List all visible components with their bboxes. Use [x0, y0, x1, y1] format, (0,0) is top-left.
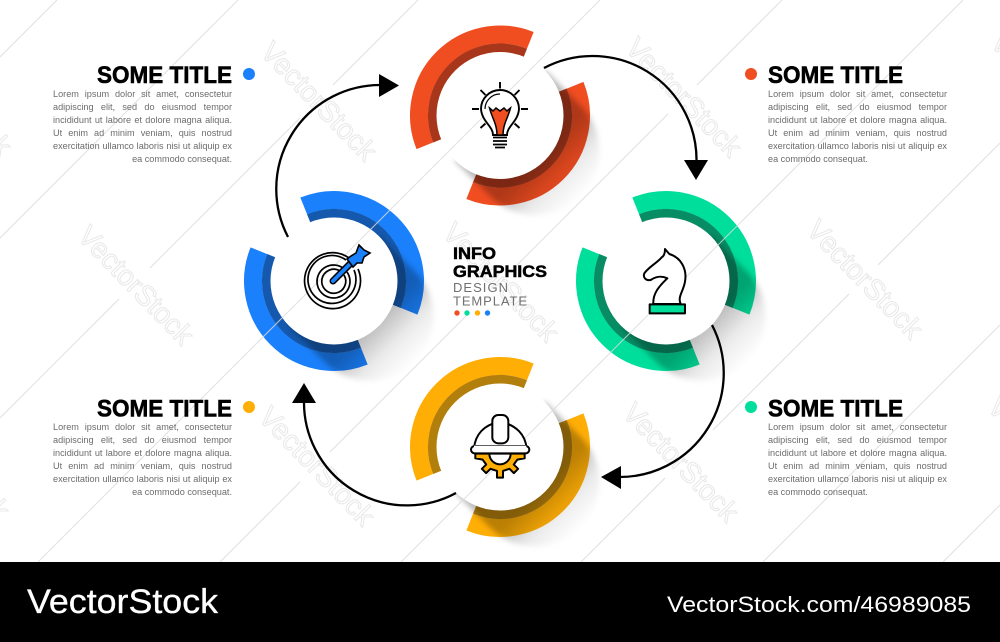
text block: top right: exercitation ullamco laboris nisi ut aliquip ex [768, 141, 947, 151]
footer bar: VectorStock [27, 583, 219, 621]
text block: top right: Ut enim ad minim veniam, quis nostrud [768, 128, 947, 138]
icon: target with arrow [305, 245, 370, 309]
text block: bottom left: Lorem ipsum dolor sit amet, consectetur [53, 422, 232, 432]
marker: top left [243, 68, 255, 80]
center heading: GRAPHICS [453, 263, 547, 281]
center colour dots [454, 310, 490, 316]
center heading [453, 245, 547, 308]
text block: bottom right: Ut enim ad minim veniam, quis nostrud [768, 461, 947, 471]
text block: top right: incididunt ut labore et dolore magna aliqua. [768, 115, 947, 125]
text block: bottom left: Ut enim ad minim veniam, quis nostrud [53, 461, 232, 471]
text block: bottom left: ea commodo consequat. [132, 487, 232, 497]
text block: bottom right [768, 422, 947, 497]
title: bottom left: SOME TITLE [97, 396, 232, 422]
watermark pattern: VectorStock [616, 397, 745, 529]
arrow: blue to red [276, 74, 399, 237]
marker: top right [745, 68, 757, 80]
footer bar [0, 562, 1000, 642]
ring: green step [585, 200, 765, 380]
watermark pattern: VectorStock [436, 217, 565, 349]
text block: top right: ea commodo consequat. [768, 154, 868, 164]
text block: top left: Ut enim ad minim veniam, quis nostrud [53, 128, 232, 138]
arrow: red to green [544, 56, 708, 180]
watermark pattern: VectorStock [71, 220, 200, 352]
icon: light bulb [472, 82, 528, 148]
marker: bottom left [243, 401, 255, 413]
text block: bottom right: adipiscing elit, sed do eiusmod tempor [768, 435, 947, 445]
watermark pattern: VectorStock [254, 36, 383, 168]
title: bottom right: SOME TITLE [768, 396, 903, 422]
text block: bottom left: adipiscing elit, sed do eiusmod tempor [53, 435, 232, 445]
text block: top right [768, 89, 947, 164]
center heading: INFO [453, 245, 496, 263]
arrow: yellow to blue [292, 383, 456, 505]
center heading: TEMPLATE [453, 294, 527, 308]
text block: bottom right: Lorem ipsum dolor sit amet, consectetur [768, 422, 947, 432]
text block: top left: exercitation ullamco laboris nisi ut aliquip ex [53, 141, 232, 151]
arrow: green to yellow [601, 325, 724, 489]
footer bar: VectorStock.com/46989085 [667, 592, 971, 617]
text block: bottom left: exercitation ullamco laboris nisi ut aliquip ex [53, 474, 232, 484]
ring: yellow step [419, 366, 599, 546]
icon: chess knight [644, 249, 685, 313]
icon: helmet with gear [471, 415, 529, 478]
text block: bottom right: ea commodo consequat. [768, 487, 868, 497]
text block: bottom left [53, 422, 232, 497]
text block: top left: Lorem ipsum dolor sit amet, consectetur [53, 89, 232, 99]
watermark pattern: VectorStock [800, 214, 929, 346]
text block: bottom right: exercitation ullamco laboris nisi ut aliquip ex [768, 474, 947, 484]
text block: top left: incididunt ut labore et dolore magna aliqua. [53, 115, 232, 125]
watermark pattern: VectorStock [252, 401, 381, 533]
text block: top left [53, 89, 232, 164]
text block: top left: adipiscing elit, sed do eiusmod tempor [53, 102, 232, 112]
text block: top right: Lorem ipsum dolor sit amet, consectetur [768, 89, 947, 99]
text block: top left: ea commodo consequat. [132, 154, 232, 164]
text block: top right: adipiscing elit, sed do eiusmod tempor [768, 102, 947, 112]
title: top left: SOME TITLE [97, 62, 232, 89]
text block: bottom right: incididunt ut labore et dolore magna aliqua. [768, 448, 947, 458]
watermark pattern: VectorStock [619, 32, 748, 164]
ring: red step [419, 35, 599, 215]
marker: bottom right [745, 401, 757, 413]
title: top right: SOME TITLE [768, 62, 903, 89]
text block: bottom left: incididunt ut labore et dolore magna aliqua. [53, 448, 232, 458]
ring: blue step [253, 200, 433, 380]
center heading: DESIGN [453, 280, 508, 295]
